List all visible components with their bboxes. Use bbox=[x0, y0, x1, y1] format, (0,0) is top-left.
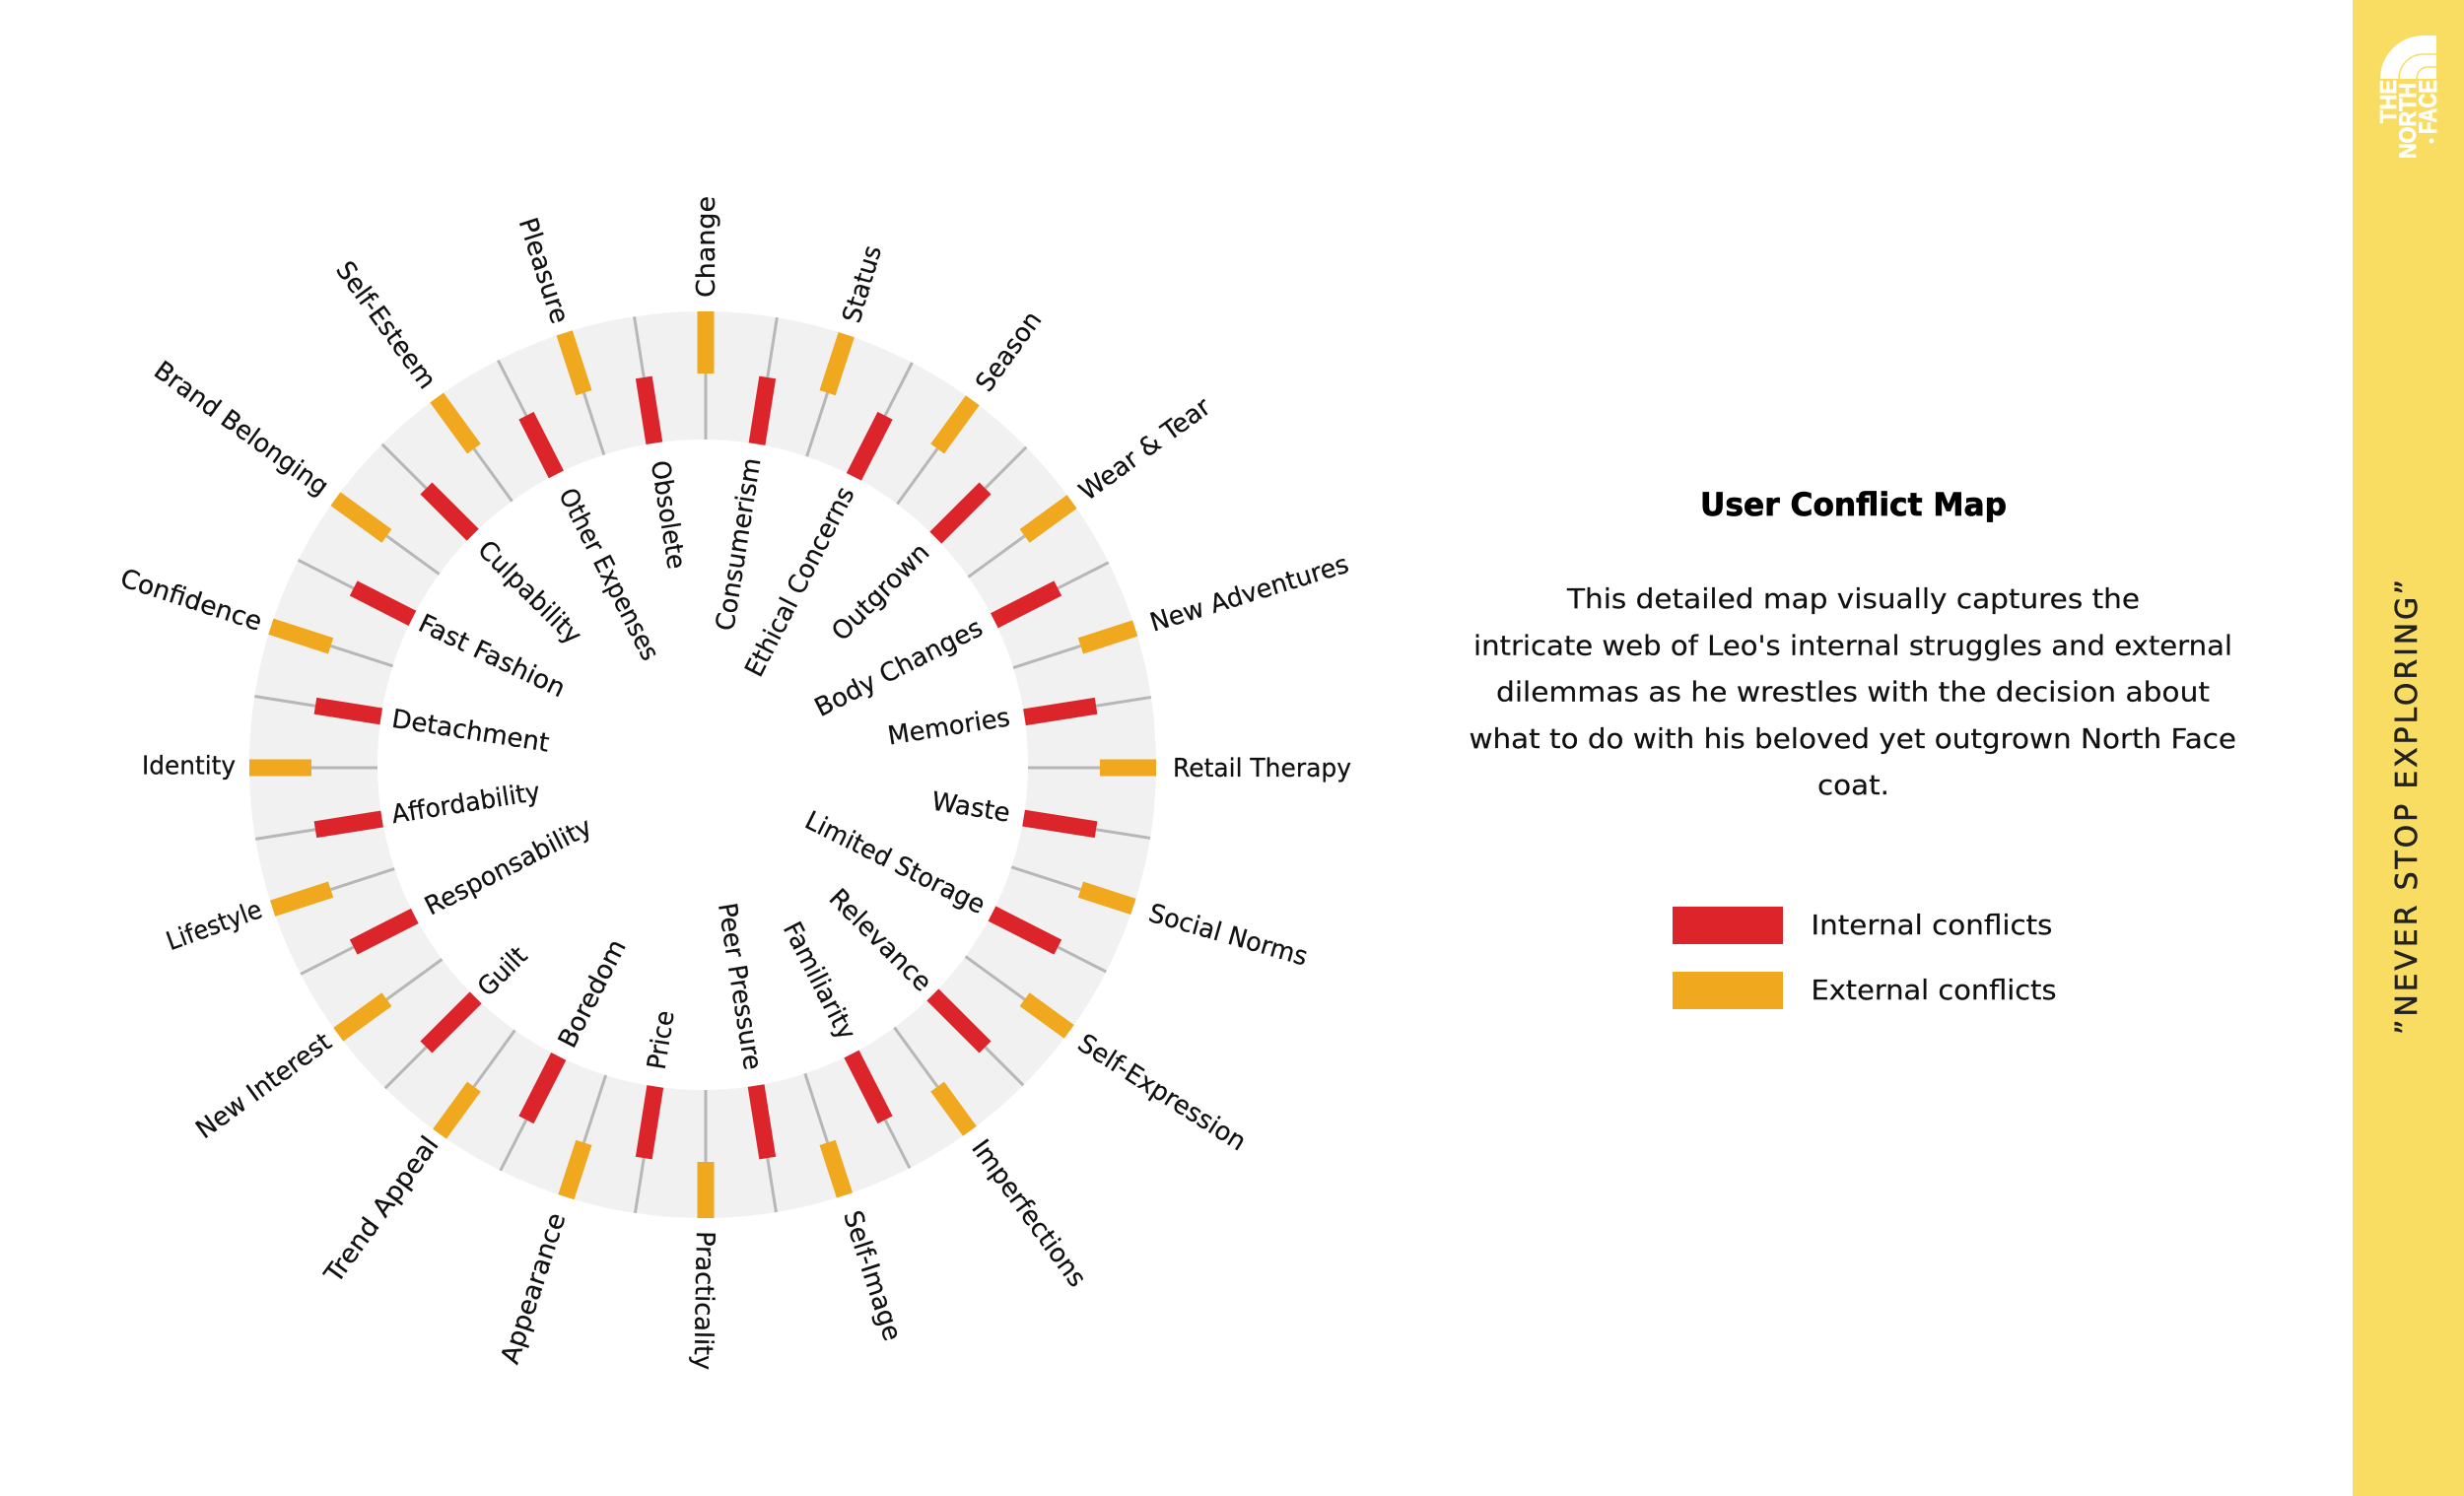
spoke: New Adventures bbox=[1010, 620, 1137, 676]
legend swatch: internal bbox=[1673, 907, 1783, 944]
label: Limited Storage: Limited Storage bbox=[800, 806, 990, 920]
spoke: Consumerism bbox=[749, 316, 786, 445]
label: Boredom: Boredom bbox=[553, 935, 633, 1053]
spoke: Responsability bbox=[297, 909, 419, 982]
spoke: Wear & Tear bbox=[963, 495, 1077, 583]
icon: The North Face logo: NORTH bbox=[2395, 83, 2422, 159]
spoke: Familiarity bbox=[844, 1051, 918, 1172]
icon: The North Face logo: THE bbox=[2375, 80, 2401, 123]
label: Lifestyle: Lifestyle bbox=[163, 895, 266, 957]
spoke: Confidence bbox=[268, 619, 395, 674]
spoke: Other Expenses bbox=[491, 357, 564, 478]
panel: yellow side stripe bbox=[2353, 0, 2464, 1496]
spoke: Change bbox=[698, 311, 714, 440]
spoke: Relevance bbox=[926, 988, 1029, 1091]
label: Season: Season bbox=[970, 306, 1048, 397]
spoke: Season bbox=[891, 395, 980, 509]
spoke: Outgrown bbox=[929, 442, 1032, 544]
spoke: Affordability bbox=[254, 811, 383, 848]
spoke: Fast Fashion bbox=[295, 553, 416, 626]
icon: The North Face logo: FACE bbox=[2415, 80, 2442, 134]
label: Peer Pressure: Peer Pressure bbox=[712, 901, 767, 1072]
label: Price: Price bbox=[643, 1008, 681, 1071]
label: Consumerism: Consumerism bbox=[711, 456, 768, 633]
slogan: ”NEVER STOP EXPLORING” bbox=[2390, 579, 2425, 1035]
spoke: Boredom bbox=[493, 1053, 566, 1175]
description text block: what to do with his beloved yet outgrown North Face bbox=[1469, 722, 2236, 755]
spoke: Price bbox=[627, 1085, 663, 1214]
label: Pleasure: Pleasure bbox=[513, 214, 575, 327]
description text block: intricate web of Leo's internal struggles and external bbox=[1473, 629, 2232, 662]
spoke: Self-Image bbox=[797, 1071, 853, 1197]
label: Self-Esteem: Self-Esteem bbox=[329, 256, 442, 395]
label: Change: Change bbox=[692, 196, 721, 298]
spoke: Body Changes bbox=[991, 555, 1113, 628]
label: Familiarity: Familiarity bbox=[777, 918, 861, 1045]
spoke: Memories bbox=[1023, 689, 1152, 725]
spoke: Guilt bbox=[379, 991, 482, 1094]
label: Other Expenses: Other Expenses bbox=[552, 484, 664, 665]
spoke: Appearance bbox=[558, 1072, 614, 1199]
label: Fast Fashion: Fast Fashion bbox=[414, 609, 570, 704]
spoke: Brand Belonging bbox=[330, 492, 445, 580]
spoke: Social Norms bbox=[1009, 859, 1135, 915]
label: Social Norms: Social Norms bbox=[1145, 899, 1311, 973]
spoke: Retail Therapy bbox=[1028, 759, 1156, 777]
label: Wear & Tear: Wear & Tear bbox=[1074, 392, 1217, 508]
legend bbox=[1673, 907, 2056, 1009]
legend swatch: external bbox=[1673, 972, 1783, 1009]
spoke: Ethical Concerns bbox=[847, 359, 920, 481]
description text block: dilemmas as he wrestles with the decision about bbox=[1496, 676, 2210, 708]
spoke: Detachment bbox=[253, 688, 382, 724]
legend label: internal: Internal conflicts bbox=[1812, 909, 2052, 941]
label: Self-Expression: Self-Expression bbox=[1072, 1029, 1251, 1157]
label: Ethical Concerns: Ethical Concerns bbox=[740, 482, 861, 682]
spoke: Obsolete bbox=[626, 315, 662, 444]
label: Identity: Identity bbox=[142, 751, 236, 781]
ring background bbox=[313, 375, 1092, 1154]
spoke: Pleasure bbox=[557, 330, 612, 457]
label: Waste: Waste bbox=[929, 787, 1012, 829]
title: User Conflict Map bbox=[1700, 486, 2007, 523]
spoke: Self-Expression bbox=[961, 950, 1074, 1039]
label: Confidence: Confidence bbox=[116, 564, 265, 638]
label: New Interest: New Interest bbox=[190, 1027, 337, 1145]
description text block: coat. bbox=[1817, 769, 1889, 801]
spoke: Lifestyle bbox=[270, 861, 397, 917]
spoke: Trend Appeal bbox=[433, 1025, 521, 1139]
label: Guilt: Guilt bbox=[472, 941, 533, 1002]
label: Responsability: Responsability bbox=[420, 812, 597, 921]
label: Self-Image: Self-Image bbox=[837, 1207, 907, 1344]
spoke: Waste bbox=[1022, 810, 1151, 847]
label: Appearance: Appearance bbox=[496, 1209, 572, 1368]
label: Culpability: Culpability bbox=[471, 535, 587, 650]
label: Outgrown: Outgrown bbox=[826, 538, 935, 647]
spoke: Limited Storage bbox=[989, 906, 1110, 980]
label: Status: Status bbox=[838, 242, 888, 326]
spoke: Imperfections bbox=[888, 1023, 977, 1136]
label: Retail Therapy: Retail Therapy bbox=[1173, 754, 1351, 783]
label: Obsolete: Obsolete bbox=[645, 458, 691, 572]
legend label: external: External conflicts bbox=[1812, 974, 2056, 1006]
spoke: Self-Esteem bbox=[430, 392, 518, 507]
label: Relevance: Relevance bbox=[823, 883, 937, 997]
label: Brand Belonging: Brand Belonging bbox=[148, 356, 334, 502]
description text block bbox=[1469, 582, 2236, 801]
spoke: Identity bbox=[249, 759, 377, 777]
label: Practicality: Practicality bbox=[688, 1231, 719, 1370]
spoke: Culpability bbox=[376, 439, 479, 541]
label: Memories: Memories bbox=[886, 703, 1012, 751]
label: Detachment: Detachment bbox=[389, 705, 551, 759]
spoke: Peer Pressure bbox=[748, 1084, 785, 1213]
label: Imperfections: Imperfections bbox=[965, 1134, 1092, 1293]
panel: radial conflict map bbox=[116, 196, 1352, 1370]
label: New Adventures: New Adventures bbox=[1146, 550, 1352, 639]
spoke: Practicality bbox=[698, 1090, 714, 1218]
label: Trend Appeal: Trend Appeal bbox=[318, 1131, 445, 1289]
label: Body Changes: Body Changes bbox=[810, 613, 988, 723]
description text block: This detailed map visually captures the bbox=[1566, 582, 2140, 615]
spoke: Status bbox=[799, 332, 855, 459]
label: Affordability: Affordability bbox=[389, 778, 542, 830]
spoke: New Interest bbox=[333, 953, 446, 1042]
icon: The North Face logo bbox=[2375, 35, 2442, 159]
